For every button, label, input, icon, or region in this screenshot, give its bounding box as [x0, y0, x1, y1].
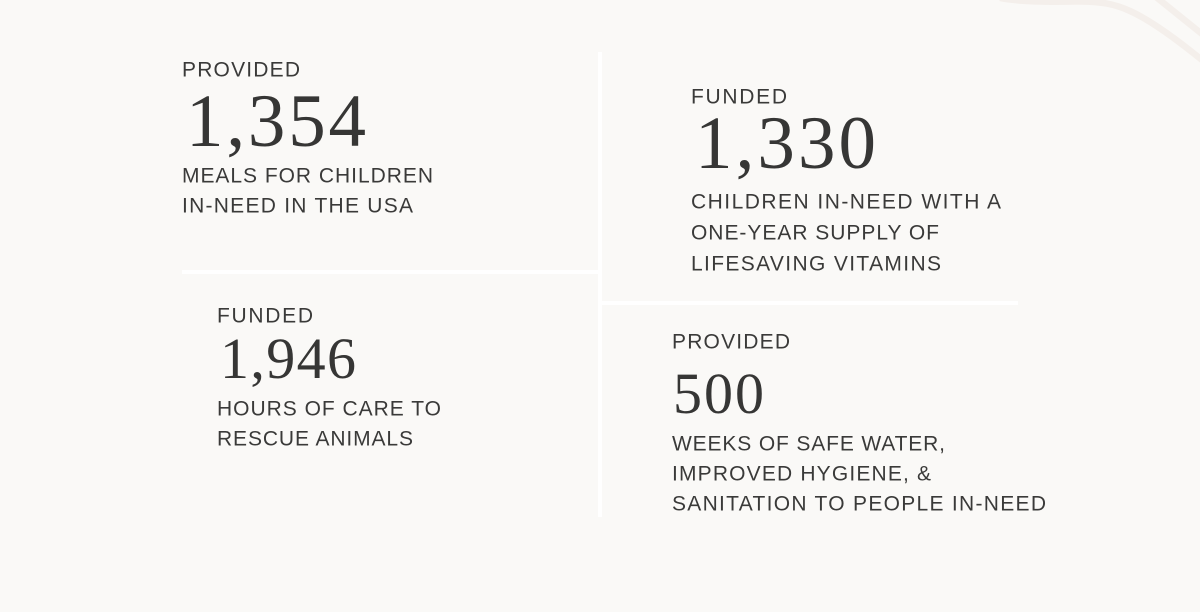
number: 1,330: 1,330	[695, 102, 876, 185]
stat: meals for children	[182, 58, 433, 218]
description: water	[672, 432, 1046, 516]
description: animals	[217, 398, 441, 450]
description: meals: IN-NEED IN THE USA	[182, 194, 413, 218]
description: water: WEEKS OF SAFE WATER,	[672, 432, 945, 456]
description: meals	[182, 164, 433, 218]
description: water: SANITATION TO PEOPLE IN-NEED	[672, 492, 1046, 516]
number: 1,946: 1,946	[220, 326, 356, 391]
label: funded: FUNDED	[691, 86, 787, 108]
description: vitamins: ONE-YEAR SUPPLY OF	[691, 222, 939, 244]
stat: safe water	[672, 330, 1046, 516]
description: water: IMPROVED HYGIENE, &	[672, 462, 931, 486]
number: 500: 500	[673, 361, 764, 426]
description: vitamins: CHILDREN IN-NEED WITH A	[691, 190, 1001, 214]
vertical divider	[598, 52, 602, 517]
description: vitamins	[691, 190, 1001, 276]
stat: vitamins	[691, 86, 1001, 276]
description: animals: HOURS OF CARE TO	[217, 398, 441, 420]
right horizontal divider	[602, 301, 1018, 305]
label: funded: FUNDED	[217, 304, 313, 328]
number: 1,354: 1,354	[186, 80, 366, 163]
label: provided: PROVIDED	[182, 58, 300, 82]
stat: animal care	[217, 304, 441, 450]
description: meals: MEALS FOR CHILDREN	[182, 164, 433, 188]
decorative curves top right	[1000, 0, 1200, 60]
description: vitamins: LIFESAVING VITAMINS	[691, 252, 941, 276]
label: provided: PROVIDED	[672, 330, 790, 354]
description: animals: RESCUE ANIMALS	[217, 428, 413, 450]
left horizontal divider	[182, 270, 598, 274]
